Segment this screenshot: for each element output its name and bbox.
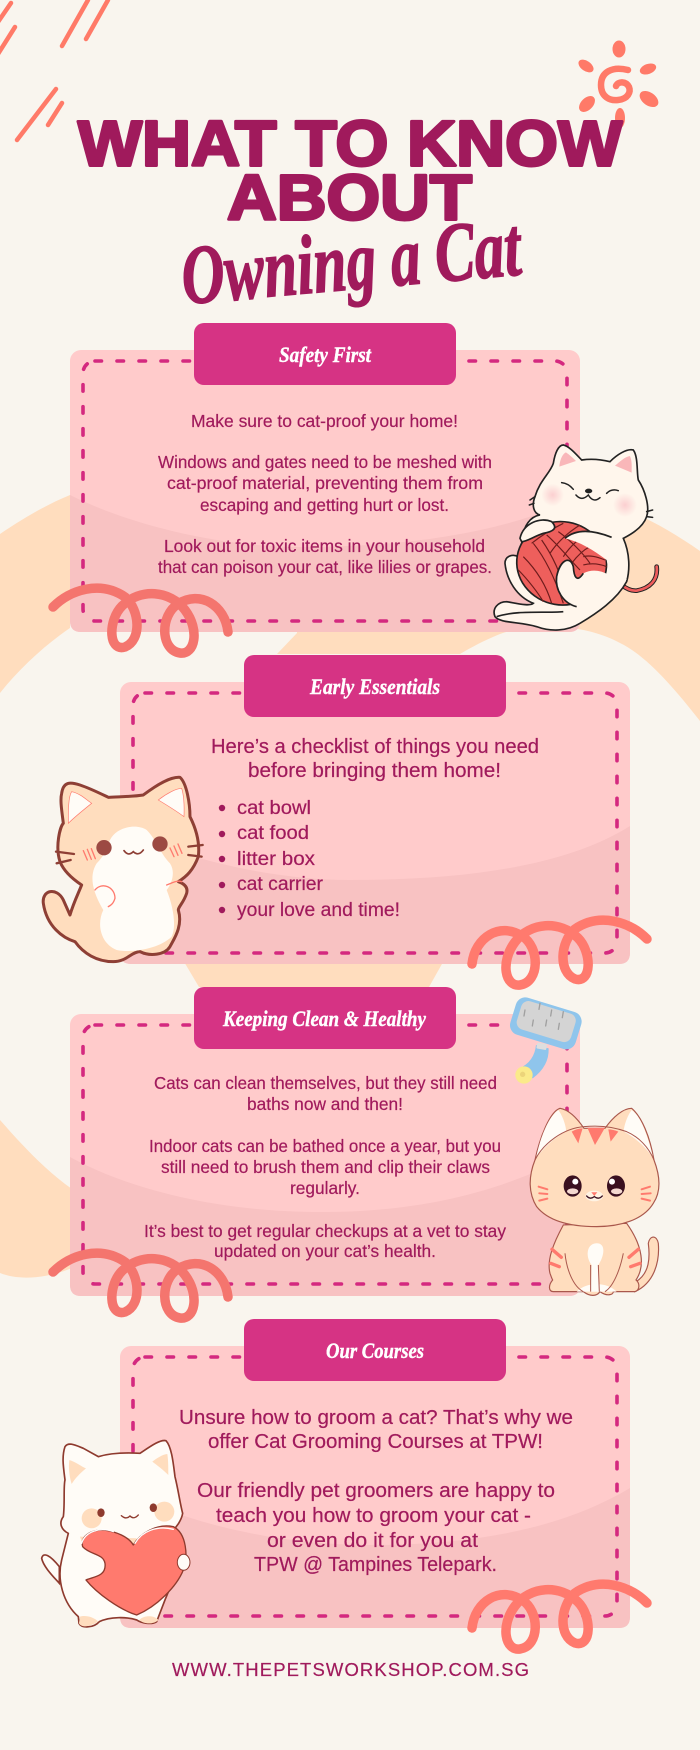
intro text: checklist: Here’s a checklist of things you need — [211, 736, 539, 758]
spiral: panel 1 — [53, 588, 228, 653]
body text: safety first: Make sure to cat-proof your home! — [191, 411, 458, 431]
body text: our courses: teach you how to groom your cat - — [216, 1505, 531, 1527]
panel: keeping clean and healthy — [70, 987, 580, 1296]
icon: cat with yarn — [494, 445, 657, 630]
panel: safety first — [70, 323, 580, 632]
panel: early essentials — [120, 655, 630, 964]
header: our courses — [244, 1319, 506, 1381]
spiral: panel 4 — [472, 1584, 647, 1649]
header: our courses: Our Courses — [326, 1338, 424, 1363]
decorative slashes — [0, 0, 108, 140]
checklist — [219, 798, 400, 921]
header: keeping clean and healthy — [194, 987, 456, 1049]
checklist: litter box — [237, 849, 316, 870]
title — [78, 108, 623, 323]
checklist: cat carrier — [237, 874, 324, 895]
header: safety first — [194, 323, 456, 385]
header: early essentials — [244, 655, 506, 717]
body text: keeping clean: updated on your cat’s health. — [214, 1241, 436, 1261]
title line: what to know: WHAT TO KNOW — [78, 108, 623, 180]
body text: our courses: offer Cat Grooming Courses at TPW! — [208, 1431, 543, 1453]
body text: keeping clean: regularly. — [290, 1178, 360, 1198]
body text: keeping clean: Indoor cats can be bathed once a year, but you — [149, 1136, 501, 1156]
icon: sitting tabby cat — [530, 1108, 659, 1295]
checklist: your love and time! — [237, 900, 400, 921]
body text: keeping clean: Cats can clean themselves, but they still need — [154, 1073, 497, 1093]
body text: our courses: Our friendly pet groomers are happy to — [197, 1480, 555, 1502]
spiral: panel 3 — [53, 1253, 228, 1318]
body text: safety first: that can poison your cat, like lilies or grapes. — [158, 557, 492, 577]
title line: about: ABOUT — [227, 162, 472, 234]
footer url: WWW.THEPETSWORKSHOP.COM.SG — [172, 1659, 529, 1680]
icon: sitting orange cat with raised paw — [43, 777, 203, 962]
body text: our courses: Unsure how to groom a cat? That’s why we — [179, 1407, 573, 1429]
icon: white cat holding heart — [42, 1440, 190, 1627]
body text: our courses — [179, 1407, 573, 1576]
body text: safety first: cat-proof material, preventing them from — [167, 473, 483, 493]
icon: sun logo — [576, 40, 661, 128]
body text: our courses: TPW @ Tampines Telepark. — [254, 1554, 497, 1576]
intro text: checklist: before bringing them home! — [248, 760, 501, 782]
header: keeping clean and healthy: Keeping Clean & Healthy — [222, 1006, 426, 1031]
intro text: checklist — [211, 736, 539, 782]
background peach shapes — [0, 495, 700, 1278]
body text: keeping clean: still need to brush them and clip their claws — [161, 1157, 490, 1177]
header: safety first: Safety First — [279, 342, 372, 367]
body text: safety first: escaping and getting hurt or lost. — [200, 495, 449, 515]
body text: safety first — [158, 411, 492, 577]
body text: keeping clean — [144, 1073, 506, 1261]
spiral: panel 2 — [472, 920, 647, 985]
body text: our courses: or even do it for you at — [267, 1530, 478, 1552]
body text: keeping clean: baths now and then! — [247, 1094, 403, 1114]
checklist: cat food — [237, 823, 309, 844]
body text: safety first: Look out for toxic items in your household — [164, 536, 485, 556]
body text: keeping clean: It’s best to get regular checkups at a vet to stay — [144, 1221, 506, 1241]
icon: blue cat brush — [507, 995, 584, 1084]
body text: safety first: Windows and gates need to be meshed with — [158, 452, 492, 472]
header: early essentials: Early Essentials — [309, 674, 440, 699]
checklist: cat bowl — [237, 798, 311, 819]
panel: our courses — [120, 1319, 630, 1628]
title line: owning a cat: Owning a Cat — [178, 200, 526, 323]
